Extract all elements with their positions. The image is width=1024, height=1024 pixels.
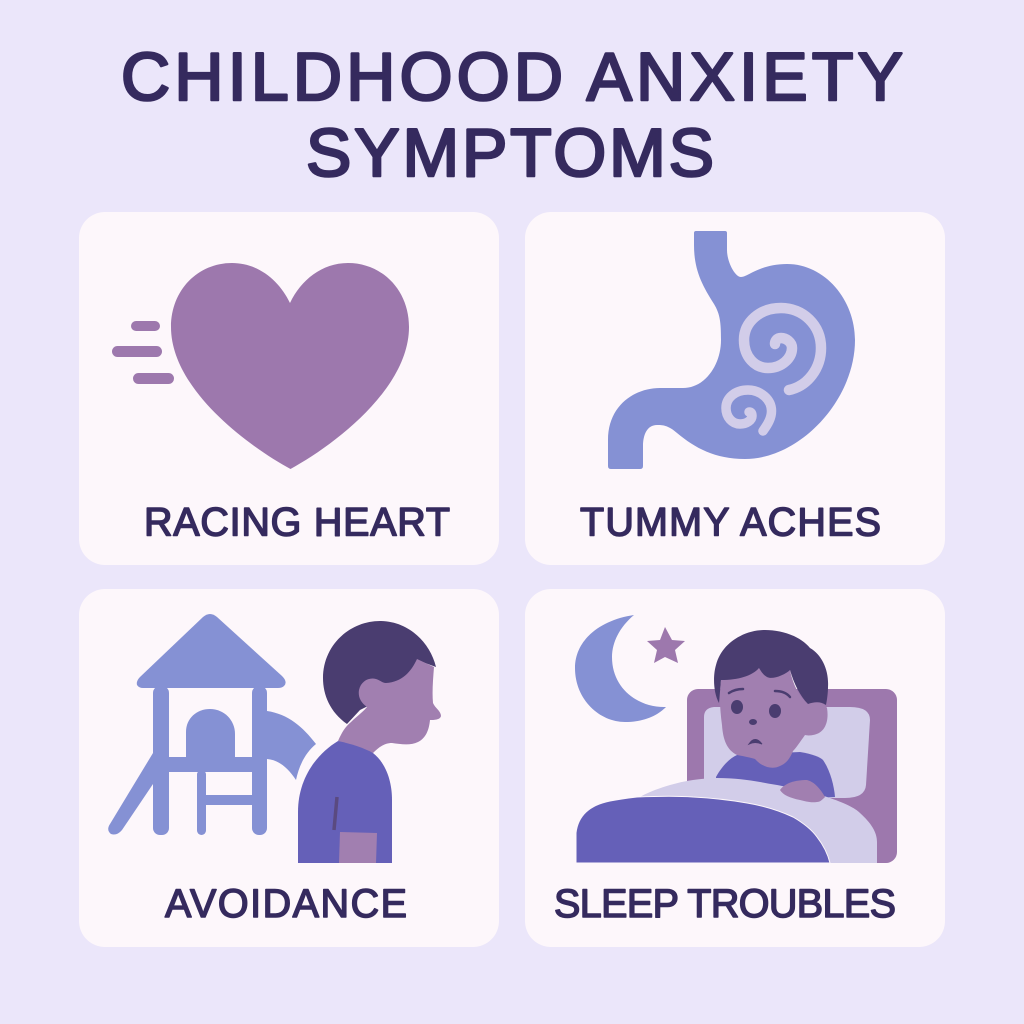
label: tummy aches: TUMMY ACHES xyxy=(580,500,881,544)
icon: light blanket xyxy=(640,778,877,863)
icon: speed lines xyxy=(112,321,174,384)
icon: large swirl xyxy=(744,308,821,390)
icon: small swirl xyxy=(726,390,772,431)
title: SYMPTOMS xyxy=(306,115,714,191)
icon: stomach xyxy=(608,231,855,469)
panel: racing heart xyxy=(79,212,499,565)
icon: playground xyxy=(108,614,316,835)
icon: moon xyxy=(575,615,666,722)
panel: avoidance xyxy=(79,589,499,947)
icon: hair xyxy=(714,630,828,705)
icon: dark blanket xyxy=(576,796,830,863)
panel: sleep troubles xyxy=(525,589,945,947)
label: avoidance: AVOIDANCE xyxy=(165,882,407,926)
label: racing heart: RACING HEART xyxy=(144,500,450,544)
panel: tummy aches xyxy=(525,212,945,565)
title: CHILDHOOD ANXIETY xyxy=(121,39,903,115)
icon: heart xyxy=(171,263,409,469)
icon: child turned away xyxy=(298,621,441,863)
title xyxy=(121,39,903,191)
icon: face details xyxy=(729,689,790,744)
label: sleep troubles: SLEEP TROUBLES xyxy=(554,882,896,926)
icon: child in bed xyxy=(576,630,897,863)
icon: star xyxy=(647,627,685,663)
icon: hand xyxy=(780,780,825,802)
